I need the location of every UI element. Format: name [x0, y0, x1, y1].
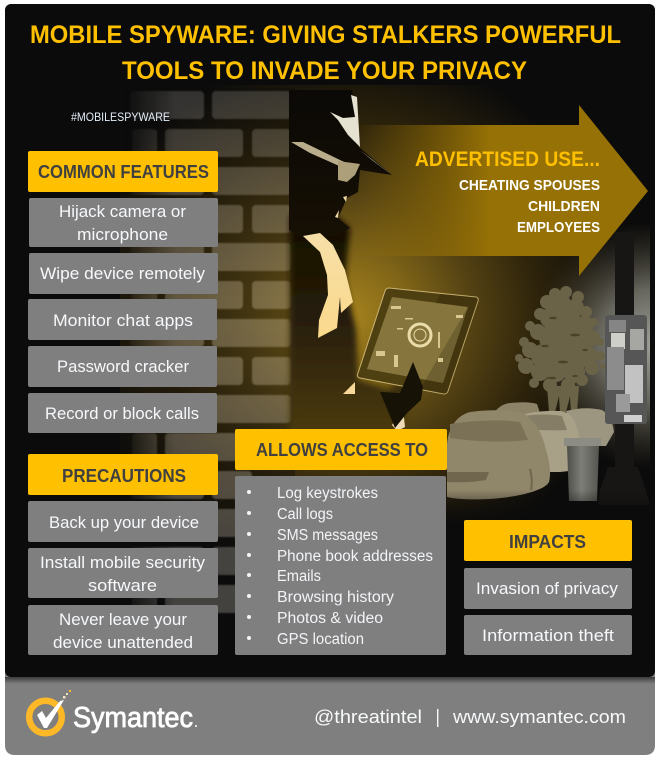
icon: tree [515, 286, 606, 412]
item: invasion of privacy: Invasion of privacy [476, 579, 618, 598]
wheel arch [530, 469, 532, 490]
heading: allows access: ALLOWS ACCESS TO [256, 440, 428, 460]
item: monitor chat [28, 299, 217, 340]
item: invasion of privacy [464, 568, 632, 609]
item: record calls: Record or block calls [45, 404, 199, 423]
item: hijack camera [29, 198, 218, 247]
street fade to black [446, 492, 597, 525]
title [30, 21, 621, 85]
far car [566, 408, 614, 446]
callout: advertised use [415, 148, 600, 236]
item: install security: software [88, 576, 157, 595]
arrow: advertised use [355, 105, 648, 276]
coat silhouette [290, 215, 413, 436]
hat crown highlight [330, 95, 360, 147]
item: record calls [28, 393, 217, 433]
item: hijack camera: microphone [77, 225, 168, 244]
callout: advertised use: ADVERTISED USE... [415, 148, 600, 171]
face highlights [335, 196, 347, 218]
main car bumper band [447, 472, 489, 482]
item: information theft: Information theft [482, 626, 614, 645]
item: wipe device: Wipe device remotely [40, 264, 205, 283]
coat lapel highlight [303, 233, 353, 338]
list text: SMS messages [277, 527, 378, 544]
wall mortar shade [160, 117, 295, 476]
second car window [523, 414, 567, 430]
coat lower highlight [343, 382, 355, 394]
item: back up [28, 501, 218, 542]
list text: Browsing history [277, 589, 394, 606]
title: MOBILE SPYWARE: GIVING STALKERS POWERFUL [30, 21, 621, 49]
heading: impacts [464, 520, 632, 561]
logo: symantec [29, 690, 197, 734]
main car [447, 410, 550, 499]
logo wordmark: Symantec [73, 702, 193, 734]
hashtag: #MOBILESPYWARE [71, 112, 170, 124]
list text: Photos & video [277, 610, 383, 627]
icon: tablet [357, 288, 478, 428]
icon: trash can [564, 438, 601, 501]
item: wipe device [29, 253, 218, 294]
bullets [247, 490, 251, 640]
tree shadows [541, 317, 588, 379]
panel: impacts [464, 520, 632, 655]
main car window [450, 420, 528, 442]
icon: logo check mark [37, 700, 64, 728]
heading: common features: COMMON FEATURES [38, 162, 209, 182]
hat brim highlight [291, 142, 344, 166]
tablet readouts [376, 306, 463, 367]
hat and head silhouette [289, 90, 392, 236]
item: never leave: device unattended [53, 633, 193, 652]
glasses [338, 161, 360, 182]
heading: impacts: IMPACTS [509, 532, 586, 552]
item: password cracker [28, 346, 217, 387]
callout: advertised use: CHILDREN [528, 198, 600, 215]
tablet dial [409, 324, 431, 346]
tablet glare [420, 294, 478, 394]
item: hijack camera: Hijack camera or [59, 202, 186, 221]
callout: advertised use: EMPLOYEES [517, 219, 600, 236]
footer contact: www.symantec.com [452, 706, 626, 727]
figure: man in hat [289, 90, 413, 436]
item: information theft [464, 615, 632, 655]
item: never leave [28, 605, 218, 655]
access list [235, 476, 446, 655]
panel: precautions [28, 454, 218, 655]
illustration: stalker scene [120, 85, 650, 614]
panel: footer band [5, 670, 655, 755]
heading: common features [28, 151, 218, 192]
list text: Phone book addresses [277, 548, 433, 565]
icon: logo sparks [63, 690, 71, 698]
brick wall [130, 91, 291, 613]
item: never leave: Never leave your [59, 610, 187, 629]
panel: allows access to [235, 429, 447, 655]
panel: common features [28, 151, 218, 433]
title: TOOLS TO INVADE YOUR PRIVACY [122, 57, 527, 85]
heading: precautions [28, 454, 218, 495]
footer shadow [5, 677, 655, 684]
icon: parked cars [447, 402, 614, 499]
list text [277, 485, 433, 648]
second car [525, 410, 580, 472]
heading: allows access [235, 429, 447, 470]
hand highlight [392, 416, 405, 429]
golden light glow [120, 85, 590, 512]
tablet screen [367, 297, 468, 383]
list text: Call logs [277, 506, 333, 523]
item: install security [28, 548, 218, 598]
heading: precautions: PRECAUTIONS [62, 466, 186, 486]
footer contact [314, 706, 626, 727]
list text: GPS location [277, 631, 364, 648]
item: password cracker: Password cracker [57, 357, 189, 376]
footer contact: @threatintel [314, 706, 422, 727]
callout: advertised use: CHEATING SPOUSES [459, 177, 600, 194]
item: back up: Back up your device [49, 513, 199, 532]
list text: Log keystrokes [277, 485, 378, 502]
rear car roof [496, 402, 540, 414]
thumb and hand [380, 362, 423, 428]
list text: Emails [277, 568, 321, 585]
hat brim edge [360, 150, 392, 175]
item: monitor chat: Monitor chat apps [53, 311, 193, 330]
logo trademark dot [195, 725, 197, 727]
item: install security: Install mobile security [40, 553, 205, 572]
grey street light [556, 230, 650, 460]
tree trunks [547, 386, 579, 412]
icon: logo ring [29, 701, 62, 733]
icon: street pole with posters [599, 244, 648, 502]
